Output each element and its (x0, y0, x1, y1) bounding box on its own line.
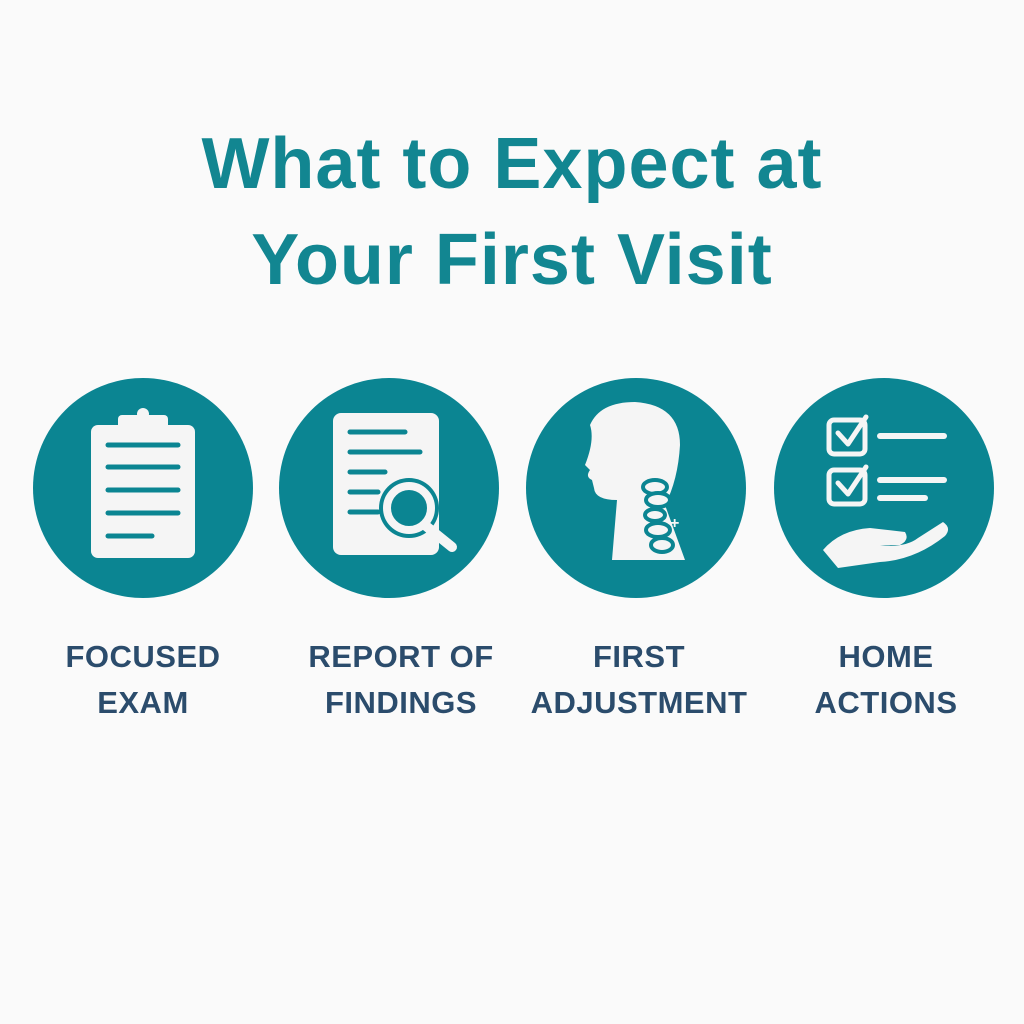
label: focused exam: EXAM (97, 685, 189, 720)
label: home actions: ACTIONS (814, 685, 958, 720)
label: focused exam (65, 639, 221, 720)
icon: head and spine (526, 378, 746, 598)
icon: head and spine: + (670, 515, 679, 532)
title: Your First Visit (251, 220, 773, 300)
label: report of findings: FINDINGS (325, 685, 477, 720)
icon: checklist and hand (774, 378, 994, 598)
label: home actions: HOME (838, 639, 934, 674)
icon: clipboard (33, 378, 253, 598)
label: report of findings: REPORT OF (308, 639, 494, 674)
label: home actions (814, 639, 958, 720)
label: first adjustment: ADJUSTMENT (531, 685, 747, 720)
title: What to Expect at (201, 124, 823, 204)
label: first adjustment (531, 639, 747, 720)
icon: report with magnifier (279, 378, 499, 598)
label: first adjustment: FIRST (593, 639, 685, 674)
label: report of findings (308, 639, 494, 720)
title (201, 124, 823, 300)
label: focused exam: FOCUSED (65, 639, 221, 674)
